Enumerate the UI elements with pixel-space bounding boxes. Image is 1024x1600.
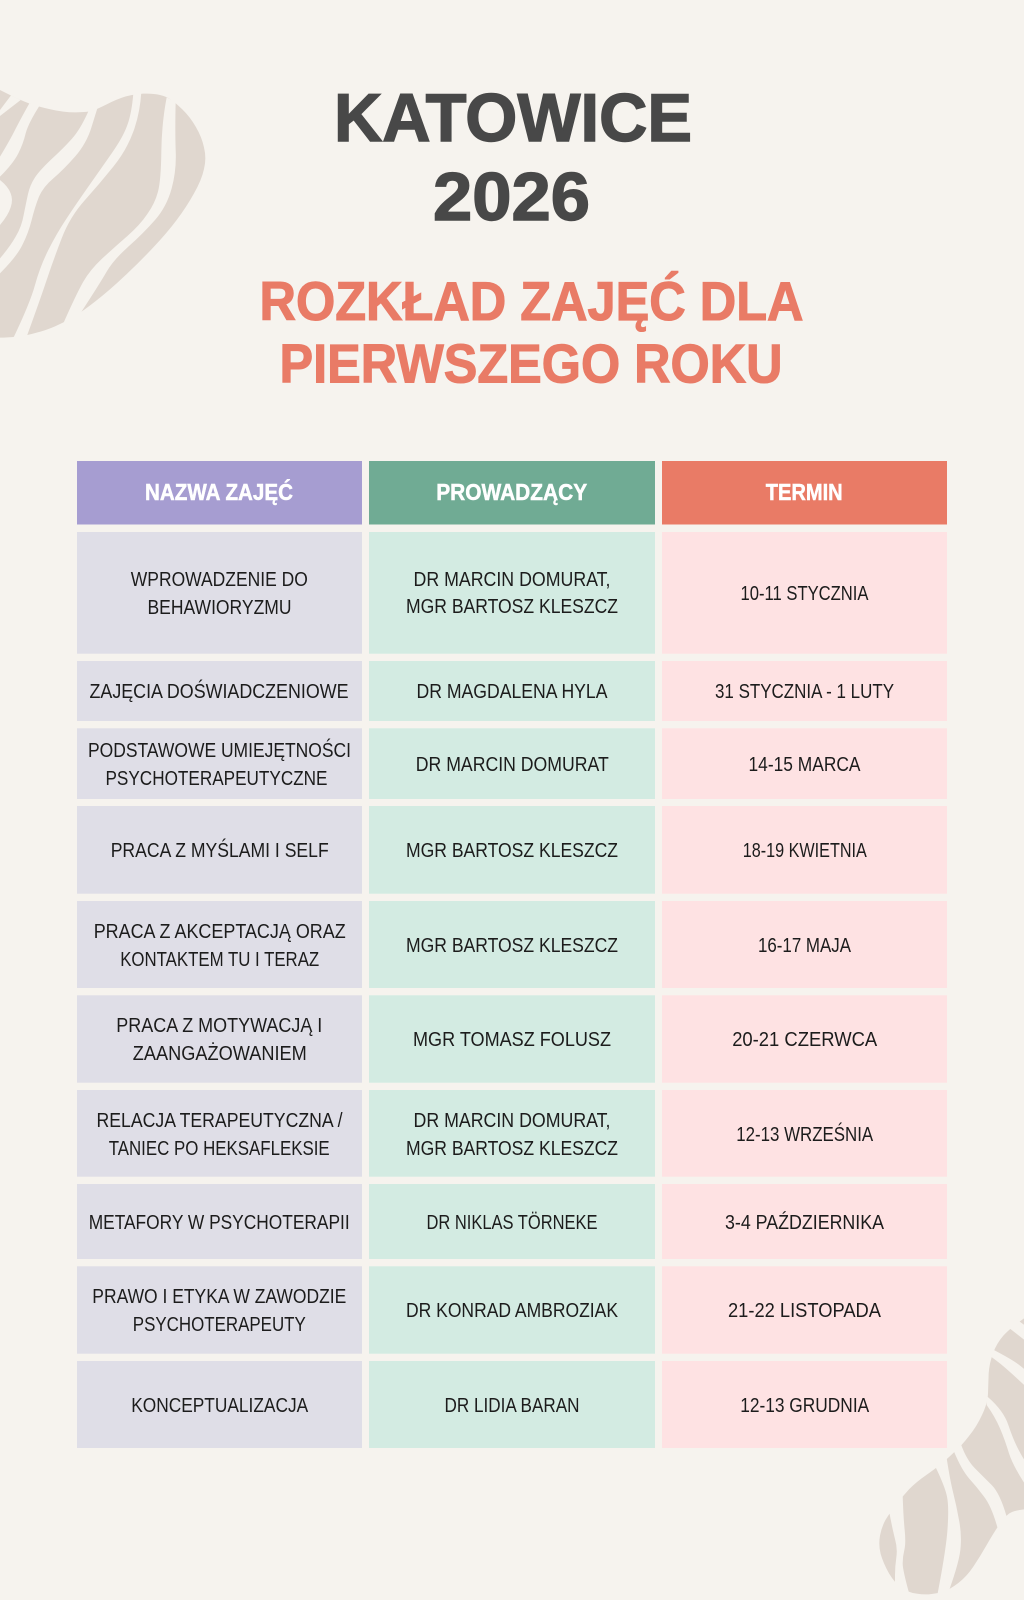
class name — [77, 1184, 362, 1259]
teacher — [369, 1361, 655, 1448]
class name — [77, 1266, 362, 1354]
row 8 — [77, 1184, 947, 1259]
date: 18-19 KWIETNIA — [743, 840, 867, 862]
teacher: MGR BARTOSZ KLESZCZ — [406, 840, 618, 862]
teacher — [369, 661, 655, 721]
decoration: bottom-right striped blob — [879, 1318, 1024, 1595]
class name — [77, 728, 362, 799]
date: 12-13 GRUDNIA — [740, 1395, 870, 1417]
date: 12-13 WRZEŚNIA — [736, 1122, 874, 1146]
teacher: MGR BARTOSZ KLESZCZ — [406, 935, 618, 957]
teacher: MGR BARTOSZ KLESZCZ — [406, 596, 618, 618]
header: prowadzący — [369, 461, 655, 524]
class name: PRACA Z AKCEPTACJĄ ORAZ — [94, 921, 346, 943]
class name: PODSTAWOWE UMIEJĘTNOŚCI — [88, 738, 351, 762]
subtitle: PIERWSZEGO ROKU — [280, 332, 782, 394]
teacher: DR MAGDALENA HYLA — [416, 681, 608, 703]
class name: WPROWADZENIE DO — [131, 569, 308, 591]
class name — [77, 995, 362, 1083]
teacher — [369, 901, 655, 988]
class name: METAFORY W PSYCHOTERAPII — [89, 1212, 350, 1234]
date — [662, 1090, 947, 1177]
row 7 — [77, 1090, 947, 1177]
table header row — [77, 461, 947, 524]
class name — [77, 532, 362, 654]
class name: RELACJA TERAPEUTYCZNA / — [96, 1110, 343, 1132]
class name — [77, 806, 362, 894]
date — [662, 1184, 947, 1259]
title: 2026 — [433, 159, 590, 235]
class name: ZAJĘCIA DOŚWIADCZENIOWE — [90, 679, 348, 703]
row 1 — [77, 532, 947, 654]
row 3 — [77, 728, 947, 799]
row 5 — [77, 901, 947, 988]
teacher: MGR BARTOSZ KLESZCZ — [406, 1138, 618, 1160]
schedule table — [77, 461, 947, 1448]
teacher: DR MARCIN DOMURAT, — [414, 1110, 610, 1132]
teacher — [369, 1184, 655, 1259]
date — [662, 901, 947, 988]
header: prowadzący: PROWADZĄCY — [436, 479, 587, 505]
row 4 — [77, 806, 947, 894]
class name — [77, 1361, 362, 1448]
date — [662, 1266, 947, 1354]
class name: PSYCHOTERAPEUTY — [133, 1314, 306, 1336]
teacher: DR MARCIN DOMURAT, — [414, 569, 610, 591]
decoration: top-left striped blob — [0, 90, 205, 339]
teacher: DR NIKLAS TÖRNEKE — [426, 1212, 598, 1234]
date: 20-21 CZERWCA — [732, 1029, 878, 1051]
date: 10-11 STYCZNIA — [740, 583, 869, 605]
date — [662, 661, 947, 721]
teacher — [369, 1090, 655, 1177]
subtitle: ROZKŁAD ZAJĘĆ DLA — [260, 270, 804, 332]
date: 14-15 MARCA — [748, 754, 861, 776]
date — [662, 532, 947, 654]
header: termin: TERMIN — [766, 479, 843, 505]
header: nazwa zajęć — [77, 461, 362, 524]
teacher — [369, 728, 655, 799]
row 10 — [77, 1361, 947, 1448]
class name: BEHAWIORYZMU — [148, 597, 292, 619]
date — [662, 1361, 947, 1448]
class name — [77, 1090, 362, 1177]
title — [334, 80, 692, 235]
class name: TANIEC PO HEKSAFLEKSIE — [109, 1138, 330, 1160]
teacher — [369, 806, 655, 894]
date — [662, 806, 947, 894]
date — [662, 995, 947, 1083]
date: 31 STYCZNIA - 1 LUTY — [715, 681, 894, 703]
date: 3-4 PAŹDZIERNIKA — [725, 1211, 885, 1234]
date: 21-22 LISTOPADA — [728, 1300, 882, 1322]
class name: PSYCHOTERAPEUTYCZNE — [106, 768, 328, 790]
header: termin — [662, 461, 947, 524]
teacher: DR LIDIA BARAN — [444, 1395, 580, 1417]
teacher: DR KONRAD AMBROZIAK — [406, 1300, 619, 1322]
date — [662, 728, 947, 799]
teacher — [369, 532, 655, 654]
subtitle — [260, 270, 804, 394]
class name: KONCEPTUALIZACJA — [131, 1395, 309, 1417]
class name: PRACA Z MOTYWACJĄ I — [116, 1015, 322, 1037]
date: 16-17 MAJA — [758, 935, 852, 957]
class name — [77, 901, 362, 988]
class name: ZAANGAŻOWANIEM — [133, 1042, 307, 1065]
row 2 — [77, 661, 947, 721]
teacher: MGR TOMASZ FOLUSZ — [413, 1029, 611, 1051]
title: KATOWICE — [334, 80, 692, 156]
header: nazwa zajęć: NAZWA ZAJĘĆ — [145, 478, 293, 505]
teacher — [369, 1266, 655, 1354]
class name: KONTAKTEM TU I TERAZ — [120, 949, 319, 971]
row 6 — [77, 995, 947, 1083]
class name: PRAWO I ETYKA W ZAWODZIE — [92, 1286, 346, 1308]
class name — [77, 661, 362, 721]
class name: PRACA Z MYŚLAMI I SELF — [111, 838, 329, 862]
teacher: DR MARCIN DOMURAT — [416, 754, 609, 776]
teacher — [369, 995, 655, 1083]
row 9 — [77, 1266, 947, 1354]
